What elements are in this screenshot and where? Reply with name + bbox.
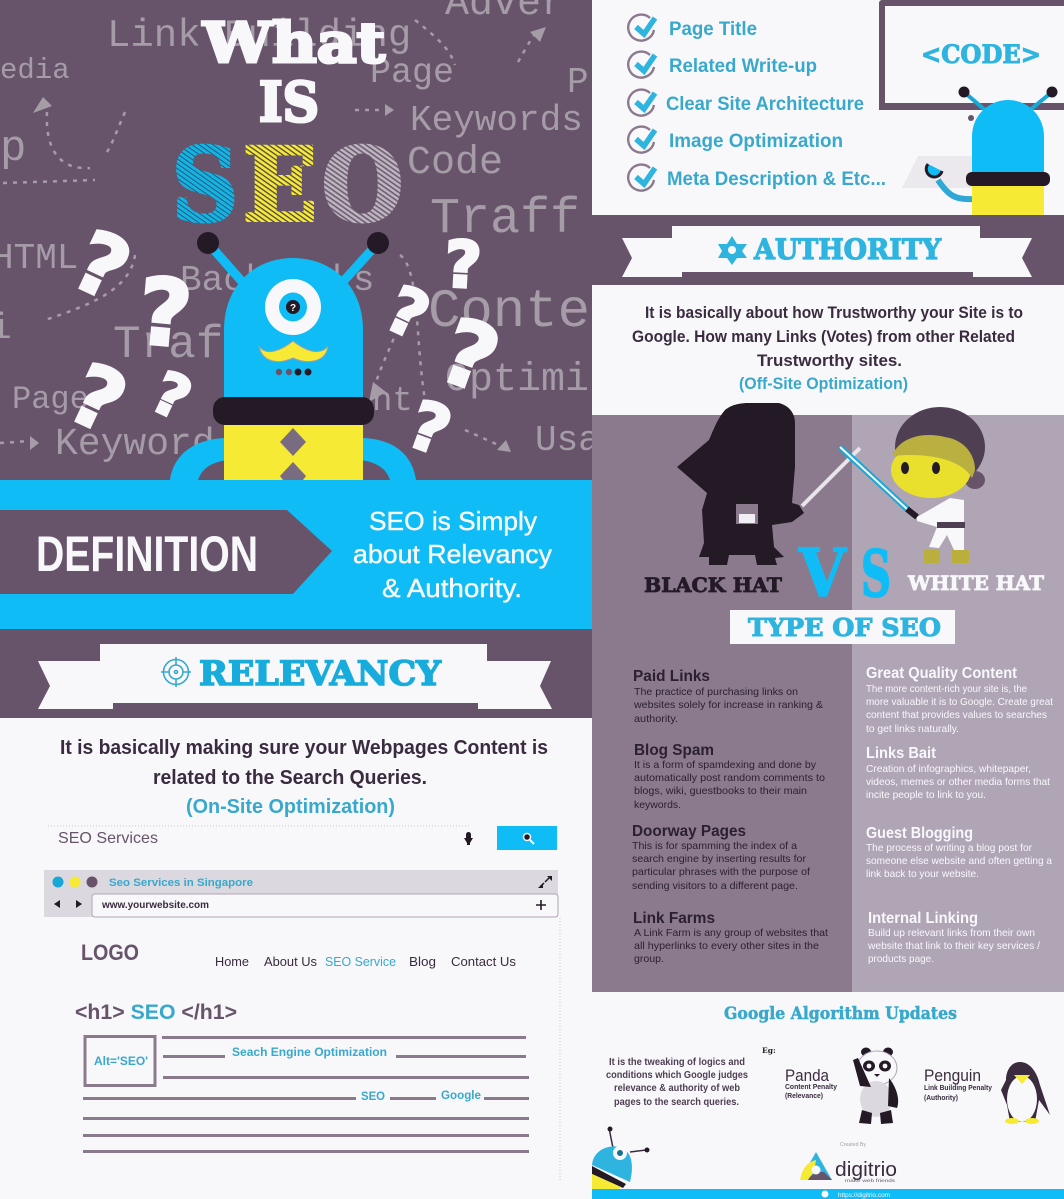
- panel: relevancy heading band: RELEVANCY: [199, 654, 442, 694]
- item: internal linking: products page.: [868, 953, 934, 965]
- heading: What is SEO: O: [322, 126, 403, 244]
- text: penguin: [924, 1066, 992, 1102]
- item: great quality content: Great Quality Content: [866, 665, 1018, 682]
- panel: browser mockup: [44, 870, 560, 1180]
- heading: type of SEO: [730, 610, 955, 644]
- arrow: definition: [0, 510, 332, 594]
- icon: monitor with code: [879, 0, 1064, 110]
- item: great quality content: to get links naturally.: [866, 723, 959, 735]
- item: paid links: Paid Links: [633, 668, 710, 685]
- heading: What is SEO: What: [202, 10, 386, 75]
- label: versus: [798, 534, 891, 612]
- text lines with keywords: SEO: [361, 1089, 385, 1103]
- label: versus: S: [861, 537, 891, 612]
- item: guest blogging: Guest Blogging: [866, 825, 973, 842]
- h1 sample: <h1> SEO </h1>: [75, 1001, 237, 1024]
- item: guest blogging: [866, 825, 1052, 880]
- text lines with keywords: [83, 1036, 529, 1153]
- background keywords: Traf: [113, 319, 223, 371]
- text: algorithm description: relevance & authority of web: [614, 1082, 740, 1094]
- text: algorithm description: [606, 1056, 748, 1108]
- arrow: definition: DEFINITION: [36, 526, 258, 582]
- label: white hat: WHITE HAT: [907, 571, 1044, 595]
- item: internal linking: Internal Linking: [868, 910, 978, 927]
- background keywords: Link Building: [107, 14, 411, 58]
- text: panda: Panda: [785, 1066, 829, 1085]
- navigation menu: SEO Service: [325, 954, 396, 969]
- text: authority description: It is basically about how Trustworthy your Site is to: [645, 303, 1023, 322]
- item: doorway pages: particular phrases with the purpose of: [632, 866, 810, 878]
- item: blog spam: It is a form of spamdexing and done by: [634, 759, 817, 771]
- icon: question marks: ?: [59, 211, 144, 321]
- text: checklist items: [666, 19, 886, 190]
- background keywords: Conte: [428, 282, 590, 343]
- item: guest blogging: someone else website and often getting a: [866, 855, 1052, 867]
- background keywords: Optimi: [445, 358, 589, 403]
- item: links bait: incite people to link to you.: [866, 789, 986, 801]
- heading: What is SEO: E: [243, 126, 317, 244]
- text: checklist items: Page Title: [669, 19, 757, 40]
- text: authority description: (Off-Site Optimization): [739, 374, 908, 393]
- panel: black hat background: [592, 415, 852, 992]
- icon: black hat dark figure: [677, 403, 860, 565]
- icon: question marks: ?: [134, 258, 196, 369]
- icon: robot repairing: [902, 86, 1058, 215]
- item: blog spam: blogs, wiki, guestbooks to their main: [634, 785, 807, 797]
- background keywords: Keywords: [410, 100, 583, 141]
- background keywords: p: [0, 124, 26, 174]
- item: great quality content: The more content-rich your site is, the: [866, 683, 1027, 695]
- text: definition statement: SEO is Simply: [369, 506, 537, 536]
- logo: digitrio: digitrio: [835, 1159, 897, 1181]
- text lines with keywords: Seach Engine Optimization: [232, 1045, 387, 1059]
- background keywords: Backlinks: [180, 260, 374, 301]
- navigation menu: Home: [215, 954, 249, 969]
- item: doorway pages: search engine by inserting results for: [632, 853, 807, 865]
- navigation menu: [215, 954, 516, 969]
- item: link farms: Link Farms: [633, 910, 715, 927]
- text: penguin: Penguin: [924, 1066, 981, 1085]
- item: doorway pages: [632, 823, 810, 892]
- background keywords: Page: [370, 53, 454, 93]
- panel: authority heading band: [592, 215, 1064, 285]
- item: links bait: [866, 745, 1050, 801]
- text: definition statement: [353, 506, 552, 603]
- footer band: [592, 1189, 1064, 1199]
- text: checklist items: Meta Description & Etc...: [667, 169, 886, 190]
- background keywords: Usa: [535, 420, 600, 461]
- background keywords: [0, 0, 600, 466]
- icon: question marks: [55, 211, 512, 471]
- text: authority description: [632, 303, 1023, 393]
- browser toolbar: [44, 870, 558, 917]
- icon: panda: [853, 1048, 898, 1124]
- icon: white hat figure: [840, 407, 985, 563]
- browser toolbar: Seo Services in Singapore: [109, 877, 253, 889]
- item: link farms: A Link Farm is any group of websites that: [634, 927, 828, 939]
- text: authority description: Trustworthy sites.: [757, 351, 902, 370]
- icon: target: [161, 657, 191, 687]
- icon: question marks: ?: [398, 386, 461, 471]
- panel: google algorithm updates: [606, 1004, 1050, 1124]
- item: blog spam: keywords.: [634, 799, 681, 811]
- panel: relevancy heading band: [0, 629, 592, 718]
- text: checklist items: Related Write-up: [669, 56, 817, 77]
- item: guest blogging: The process of writing a blog post for: [866, 842, 1032, 854]
- footer band: https://digitrio.com: [838, 1193, 890, 1199]
- icon: question marks: ?: [142, 358, 201, 434]
- text: algorithm description: pages to the search queries.: [614, 1096, 739, 1108]
- icon: small robot: [592, 1126, 650, 1190]
- label: black hat: BLACK HAT: [644, 573, 782, 597]
- navigation menu: Blog: [409, 954, 436, 969]
- icon: microphone: [464, 832, 473, 845]
- logo text: LOGO: [81, 940, 139, 965]
- item: blog spam: automatically post random comments to: [634, 772, 825, 784]
- text: relevancy description: related to the Search Queries.: [153, 767, 427, 789]
- item: blog spam: Blog Spam: [634, 742, 714, 759]
- panel: type of SEO comparison: [592, 415, 1064, 992]
- icon: question marks: ?: [442, 228, 483, 304]
- item: great quality content: content that provides values to searches: [866, 709, 1047, 721]
- icon: monitor with code: <CODE>: [921, 40, 1041, 69]
- panel: white hat background: [852, 415, 1064, 992]
- icon: question marks: ?: [427, 298, 512, 415]
- browser toolbar: www.yourwebsite.com: [101, 900, 209, 911]
- text: panda: (Relevance): [785, 1093, 823, 1100]
- background keywords: Keyword: [55, 423, 215, 466]
- item: links bait: videos, memes or other media forms that: [866, 776, 1050, 788]
- text: panda: [785, 1066, 837, 1100]
- text: relevancy description: (On-Site Optimization): [186, 796, 395, 818]
- item: paid links: authority.: [634, 713, 678, 725]
- heading: google updates: Google Algorithm Updates: [724, 1004, 957, 1024]
- icon: main robot: [170, 232, 416, 480]
- text: penguin: (Authority): [924, 1095, 958, 1102]
- heading: What is SEO: [172, 10, 403, 244]
- background keywords: Traff: [430, 191, 580, 248]
- column: white hat techniques: [866, 665, 1053, 965]
- navigation menu: About Us: [264, 954, 317, 969]
- item: guest blogging: link back to your website.: [866, 868, 979, 880]
- label: versus: V: [798, 534, 848, 612]
- label: example: Eg:: [762, 1046, 776, 1055]
- column: black hat techniques: [632, 668, 828, 965]
- panel: authority heading band: AUTHORITY: [753, 233, 942, 266]
- text: authority description: Google. How many Links (Votes) from other Related: [632, 327, 1015, 346]
- icon: question marks: ?: [375, 272, 440, 355]
- text: definition statement: about Relevancy: [353, 539, 552, 569]
- icon: question marks: ?: [55, 344, 140, 454]
- panel: hero chalkboard: [0, 0, 600, 480]
- logo: digitrio: make web friends: [845, 1178, 896, 1183]
- navigation menu: Contact Us: [451, 954, 516, 969]
- panel: search bar: SEO Services: [58, 830, 158, 847]
- dotted arrows: [0, 20, 546, 452]
- item: doorway pages: sending visitors to a different page.: [632, 880, 798, 892]
- item: paid links: [633, 668, 823, 725]
- text: panda: Content Penalty: [785, 1084, 837, 1091]
- text: checklist items: Image Optimization: [669, 131, 843, 152]
- icon: star: [718, 236, 747, 265]
- text lines with keywords: Google: [441, 1088, 481, 1102]
- icon: checks: [628, 15, 655, 191]
- item: internal linking: Build up relevant links from their own: [868, 927, 1035, 939]
- heading: What is SEO: S: [172, 126, 238, 244]
- icon: main robot: ?: [290, 303, 296, 314]
- button: search: [497, 826, 557, 850]
- text: relevancy description: It is basically making sure your Webpages Content is: [60, 737, 548, 759]
- item: link farms: all hyperlinks to every other sites in the: [634, 940, 819, 952]
- background keywords: Page: [12, 381, 89, 418]
- panel: on-site checklist: [628, 15, 886, 191]
- text: penguin: Link Building Penalty: [924, 1085, 992, 1092]
- panel: definition band: [0, 480, 592, 629]
- text: algorithm description: conditions which Google judges: [606, 1069, 748, 1081]
- background keywords: P: [567, 62, 589, 103]
- item: doorway pages: This is for spamming the index of a: [632, 840, 797, 852]
- item: links bait: Creation of infographics, whitepaper,: [866, 763, 1031, 775]
- item: great quality content: [866, 665, 1053, 735]
- heading: What is SEO: IS: [259, 70, 319, 134]
- item: link farms: group.: [634, 953, 664, 965]
- image placeholder: Alt='SEO': [94, 1054, 148, 1068]
- text: algorithm description: It is the tweaking of logics and: [609, 1056, 745, 1068]
- background keywords: edia: [0, 54, 70, 87]
- item: internal linking: [867, 910, 1040, 965]
- item: links bait: Links Bait: [866, 745, 937, 762]
- text: created by: Created By: [840, 1142, 867, 1148]
- heading: type of SEO: TYPE OF SEO: [748, 613, 941, 642]
- background keywords: Code: [407, 141, 503, 186]
- icon: penguin: [1001, 1062, 1050, 1124]
- item: doorway pages: Doorway Pages: [632, 823, 746, 840]
- panel: search bar: [48, 826, 557, 850]
- image placeholder: [85, 1036, 155, 1086]
- item: paid links: The practice of purchasing links on: [634, 686, 798, 698]
- item: link farms: [633, 910, 828, 965]
- item: great quality content: more valuable it is to Google. Create great: [866, 696, 1053, 708]
- item: paid links: websites solely for increase in ranking &: [633, 699, 823, 711]
- text: relevancy description: [60, 737, 548, 818]
- item: blog spam: [634, 742, 825, 811]
- logo: digitrio: [800, 1152, 897, 1183]
- item: internal linking: website that link to their key services /: [867, 940, 1040, 952]
- background keywords: nt: [372, 383, 413, 421]
- text: checklist items: Clear Site Architecture: [666, 94, 864, 115]
- text: definition statement: & Authority.: [382, 573, 522, 603]
